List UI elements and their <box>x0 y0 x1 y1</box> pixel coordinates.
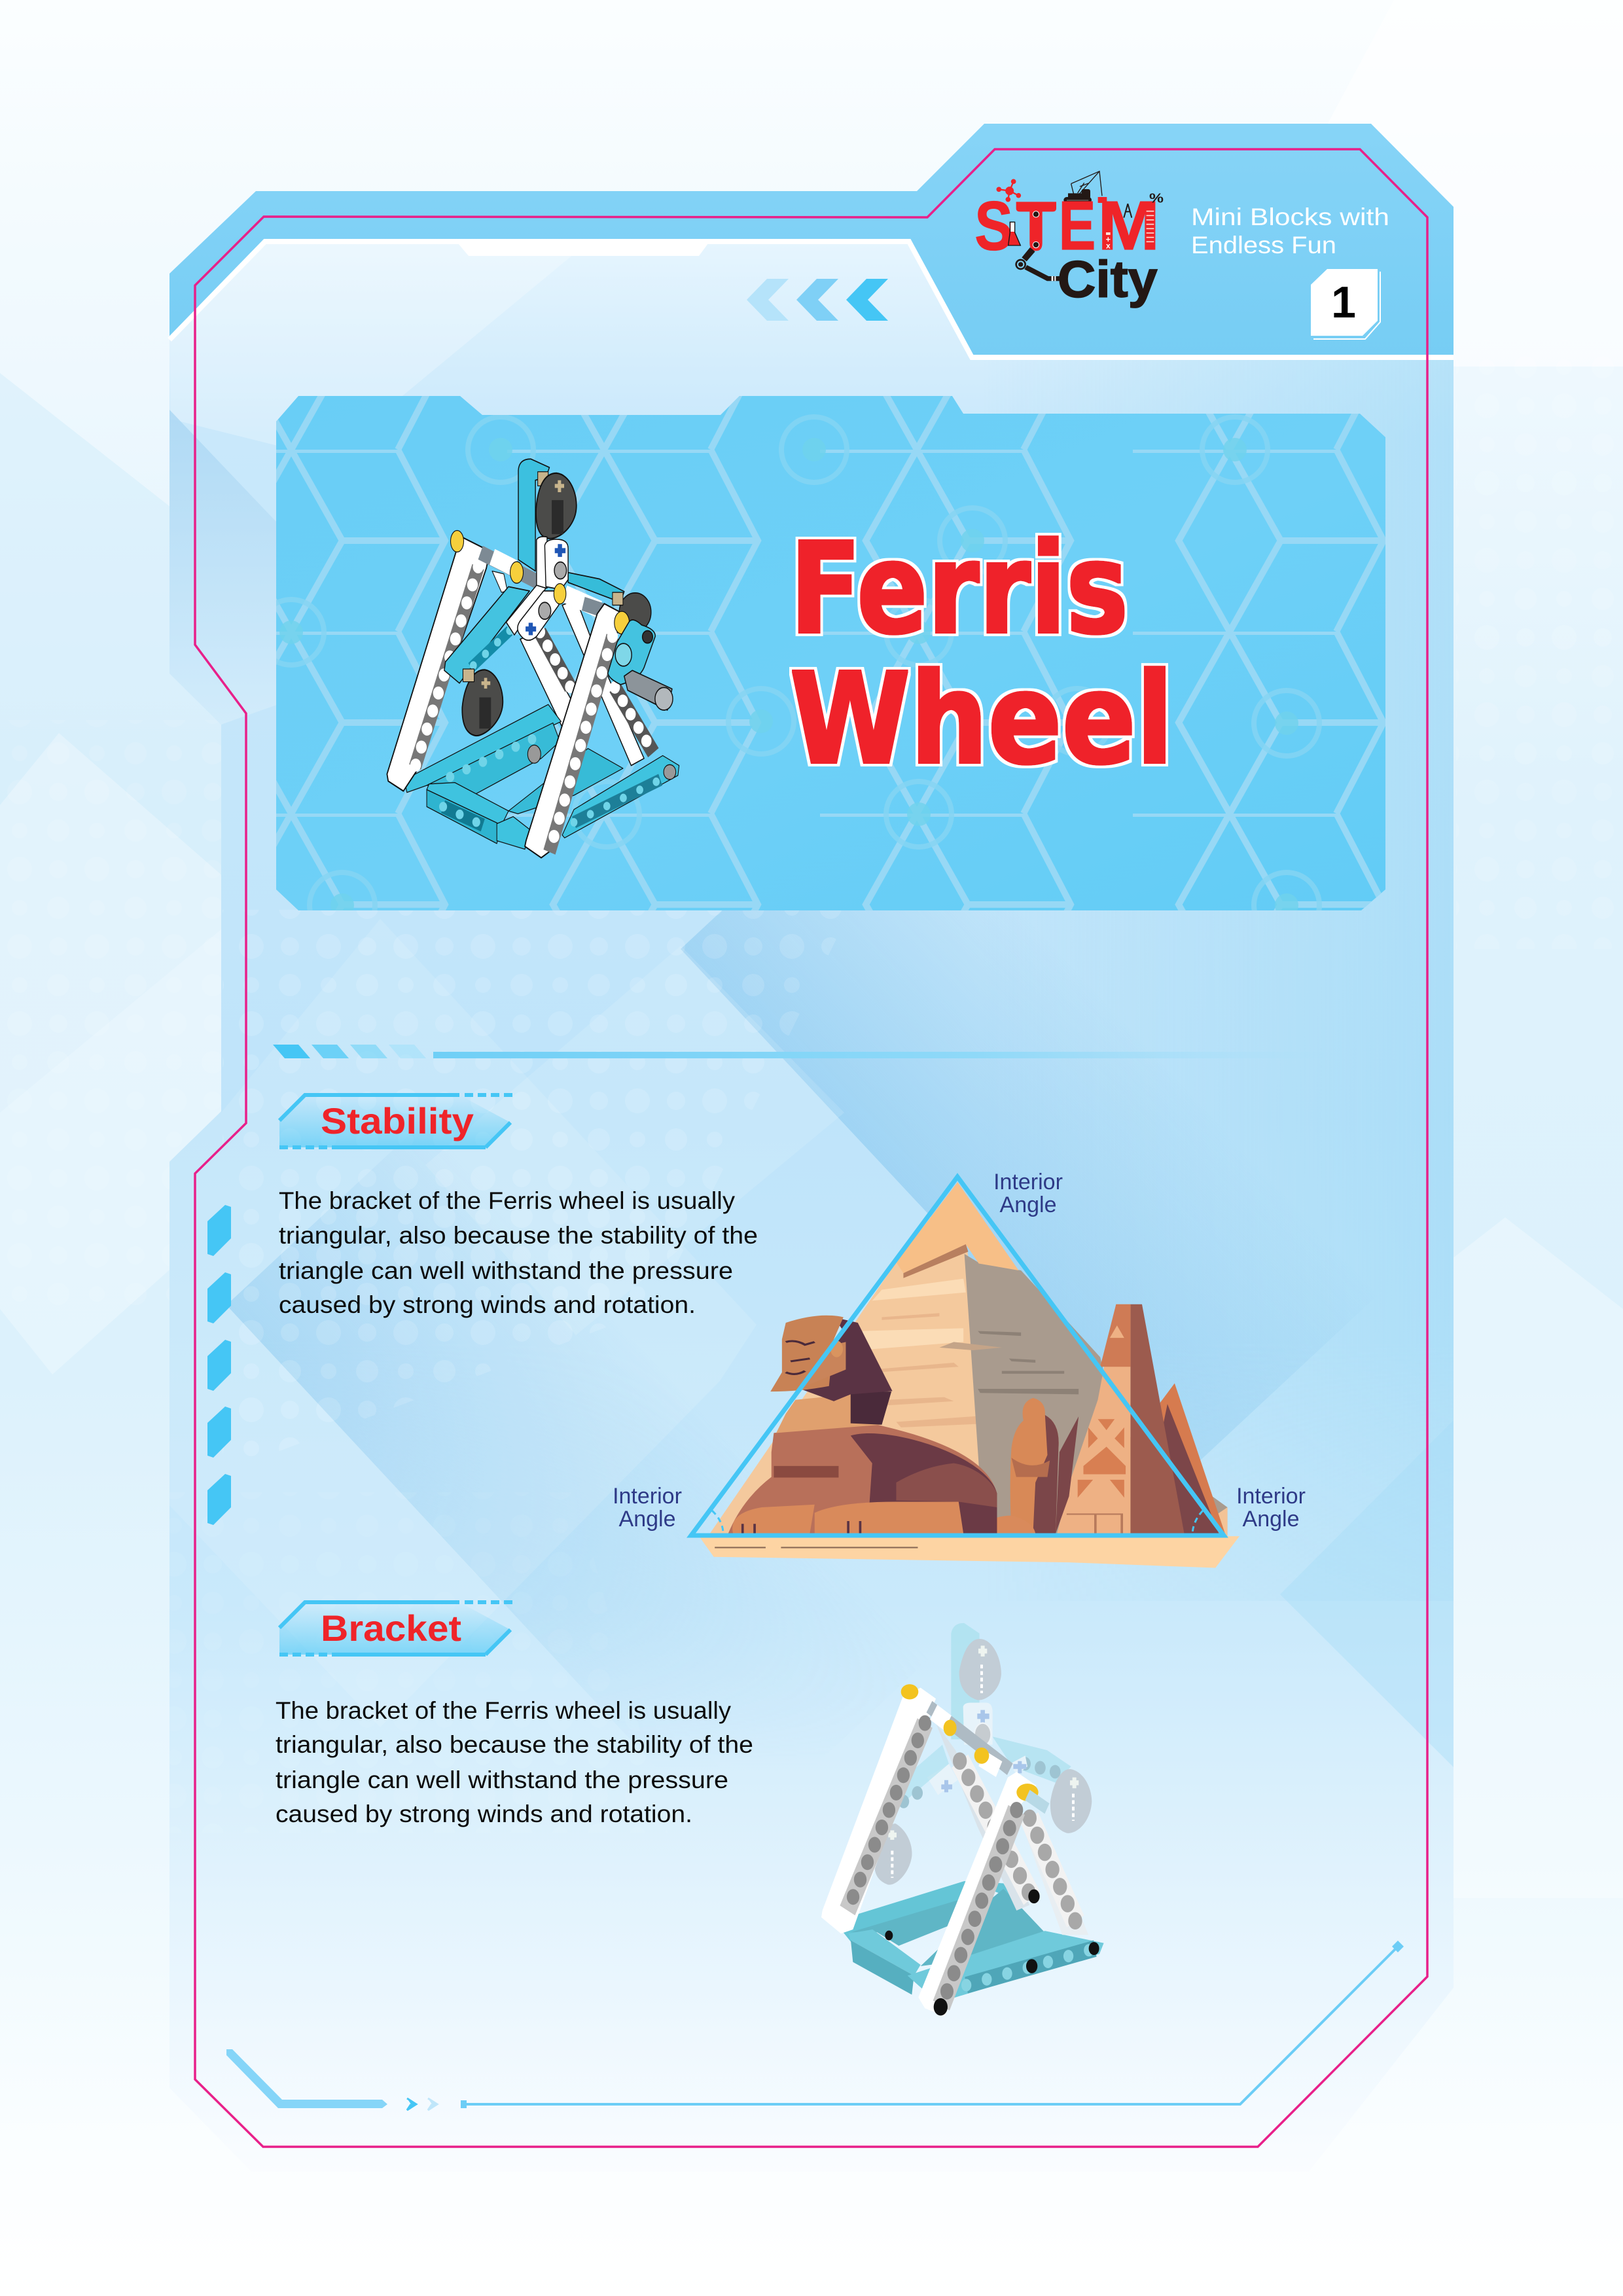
tagline: Endless Fun <box>1191 232 1336 259</box>
lower wheel <box>462 669 503 736</box>
title banner <box>259 396 1389 938</box>
left leg <box>387 537 490 791</box>
pale upright <box>951 1623 980 1740</box>
stability text: triangle can well withstand the pressure <box>279 1257 733 1284</box>
heading: Bracket: Bracket <box>321 1607 461 1649</box>
heading: Stability <box>279 1095 514 1147</box>
stability text: The bracket of the Ferris wheel is usually <box>279 1187 736 1214</box>
magenta frame line <box>195 149 1427 2147</box>
back pale arm <box>993 1736 1071 1783</box>
icon: ruler ticks <box>1147 211 1154 242</box>
back teal arm <box>568 573 624 602</box>
logo word STEM: M <box>1097 187 1160 264</box>
page number badge <box>1311 269 1380 339</box>
icon: flask <box>1008 222 1020 245</box>
label: top interior angle: Angle <box>1000 1193 1056 1217</box>
logo: STEM City <box>974 171 1164 308</box>
back legs <box>936 1723 1088 1935</box>
label: top interior angle <box>993 1170 1063 1217</box>
page number badge: 1 <box>1331 278 1356 327</box>
bracket text: triangular, also because the stability of the <box>276 1731 753 1758</box>
right wheel <box>613 592 651 632</box>
lego ferris wheel model, line art <box>387 459 679 858</box>
sphinx <box>728 1316 997 1534</box>
label: top interior angle: Interior <box>993 1170 1063 1194</box>
upright teal beam <box>518 459 550 571</box>
label: right interior angle <box>1236 1484 1306 1532</box>
body panel <box>169 242 1454 2172</box>
lower teal arm <box>444 586 529 683</box>
top wheel <box>536 473 577 539</box>
title: Ferris Wheel: Wheel <box>790 647 1173 793</box>
label: right interior angle: Angle <box>1243 1507 1299 1532</box>
front right leg <box>525 603 630 858</box>
obelisk <box>1056 1304 1225 1534</box>
tagline: Mini Blocks with <box>1191 204 1389 230</box>
icon: molecule <box>997 180 1020 201</box>
stability text: caused by strong winds and rotation. <box>279 1291 696 1318</box>
logo word STEM <box>974 187 1160 265</box>
tagline <box>1191 204 1389 259</box>
stability text: triangular, also because the stability of the <box>279 1222 758 1249</box>
section divider <box>273 1045 1336 1058</box>
math symbols <box>1106 232 1111 250</box>
front axle pin <box>1016 1784 1047 1808</box>
right axle <box>554 584 604 611</box>
math symbols: x <box>1106 241 1111 250</box>
axle <box>929 1707 1010 1769</box>
bracket text: caused by strong winds and rotation. <box>276 1801 692 1827</box>
robot arm <box>1015 247 1065 281</box>
header band <box>169 124 1454 357</box>
logo word City: City <box>1058 250 1158 308</box>
stability text <box>279 1187 758 1318</box>
pale lower arm <box>861 1745 949 1829</box>
heading: Bracket <box>279 1602 514 1655</box>
title: Ferris Wheel: Ferris <box>790 516 1128 662</box>
logo word STEM: S <box>974 188 1013 265</box>
label: left interior angle: Angle <box>619 1507 675 1532</box>
crank <box>608 620 673 710</box>
robot joints <box>1033 211 1039 248</box>
corner accent lines <box>226 1941 1404 2110</box>
label: left interior angle <box>613 1484 682 1532</box>
front leg <box>918 1772 1036 2017</box>
wheels <box>874 1639 1092 1885</box>
icon: crane <box>1064 171 1102 203</box>
heading: Stability: Stability <box>321 1100 474 1141</box>
interior angle triangle <box>691 1177 1224 1535</box>
pyramid and sphinx illustration <box>698 1182 1240 1568</box>
ground <box>698 1535 1240 1568</box>
base frame <box>834 1881 1104 2003</box>
left leg <box>821 1684 936 1933</box>
bracket text: The bracket of the Ferris wheel is usually <box>276 1697 732 1724</box>
lego bracket model, rendered <box>821 1623 1104 2017</box>
label: right interior angle: Interior <box>1236 1484 1306 1509</box>
bracket text: triangle can well withstand the pressure <box>276 1767 728 1793</box>
percent sign: % <box>1149 191 1164 206</box>
pyramid <box>709 1182 1228 1536</box>
side tabs <box>207 1205 231 1525</box>
title: Ferris Wheel <box>790 516 1173 793</box>
person statue <box>979 1398 1059 1534</box>
logo word STEM: E <box>1059 187 1096 264</box>
back legs <box>492 571 653 766</box>
center white plates <box>506 537 568 640</box>
icon: compass <box>1124 204 1132 218</box>
base frame <box>404 704 679 850</box>
white plates <box>927 1702 1027 1795</box>
label: left interior angle: Interior <box>613 1484 682 1509</box>
chevron arrows <box>747 279 888 321</box>
math symbols: + <box>1106 235 1111 244</box>
axle <box>451 530 539 583</box>
bracket text <box>276 1697 753 1827</box>
